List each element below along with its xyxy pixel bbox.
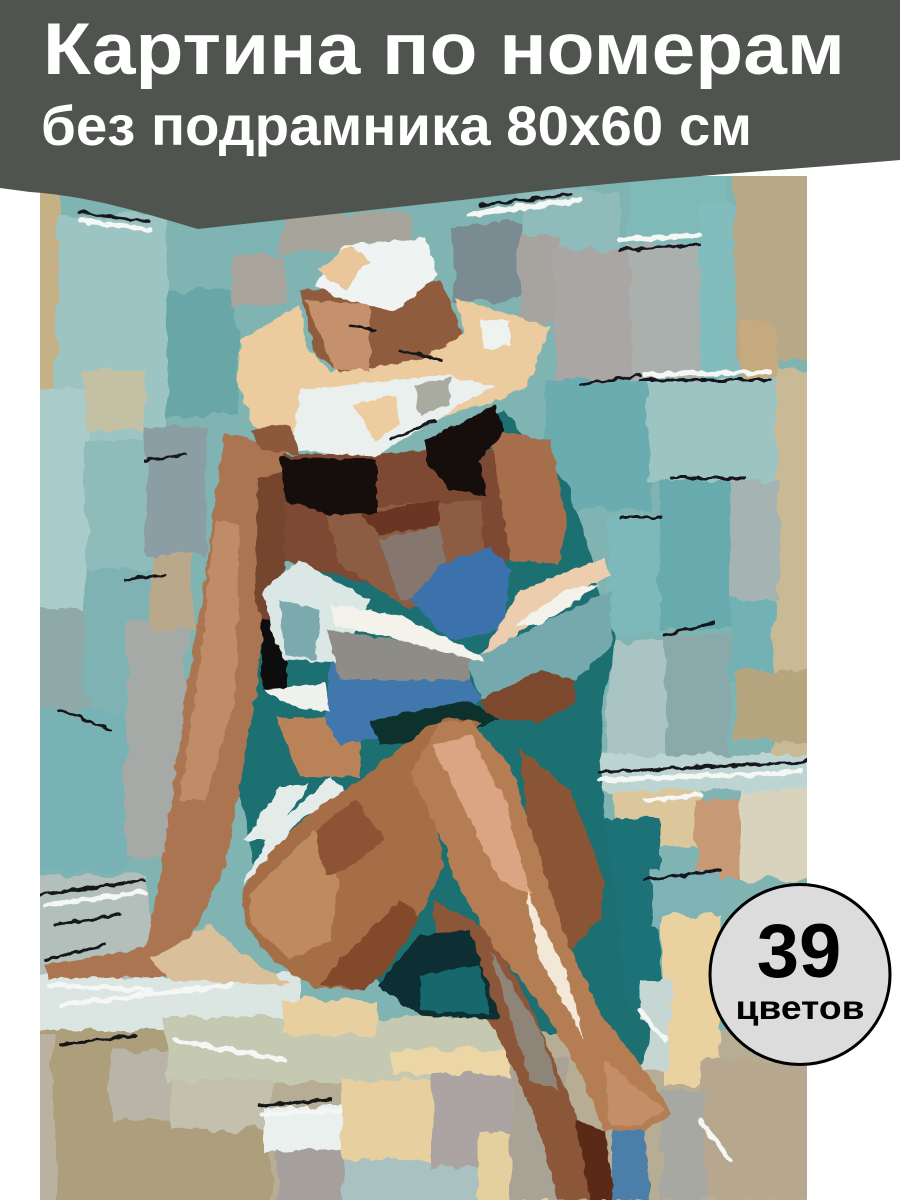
badge: 39 colours: цветов bbox=[736, 989, 864, 1026]
header banner bbox=[0, 0, 900, 229]
painting background: abstract wall bbox=[30, 170, 815, 1200]
title: Картина по номерам bbox=[43, 9, 845, 90]
figure: crossed legs bbox=[150, 717, 672, 1200]
badge: 39 colours: 39 bbox=[757, 909, 841, 994]
badge: 39 colours bbox=[710, 884, 890, 1064]
figure shadow bbox=[225, 410, 650, 1070]
figure: arm and torso bbox=[44, 405, 567, 978]
figure: straw hat bbox=[238, 238, 550, 457]
figure: blue and white dress bbox=[242, 547, 510, 885]
painting: woman reading in a sun hat bbox=[30, 170, 815, 1200]
subtitle: без подрамника 80х60 см bbox=[41, 94, 752, 157]
figure: open book bbox=[327, 557, 612, 745]
impasto highlights and dark strokes bbox=[40, 195, 805, 1160]
